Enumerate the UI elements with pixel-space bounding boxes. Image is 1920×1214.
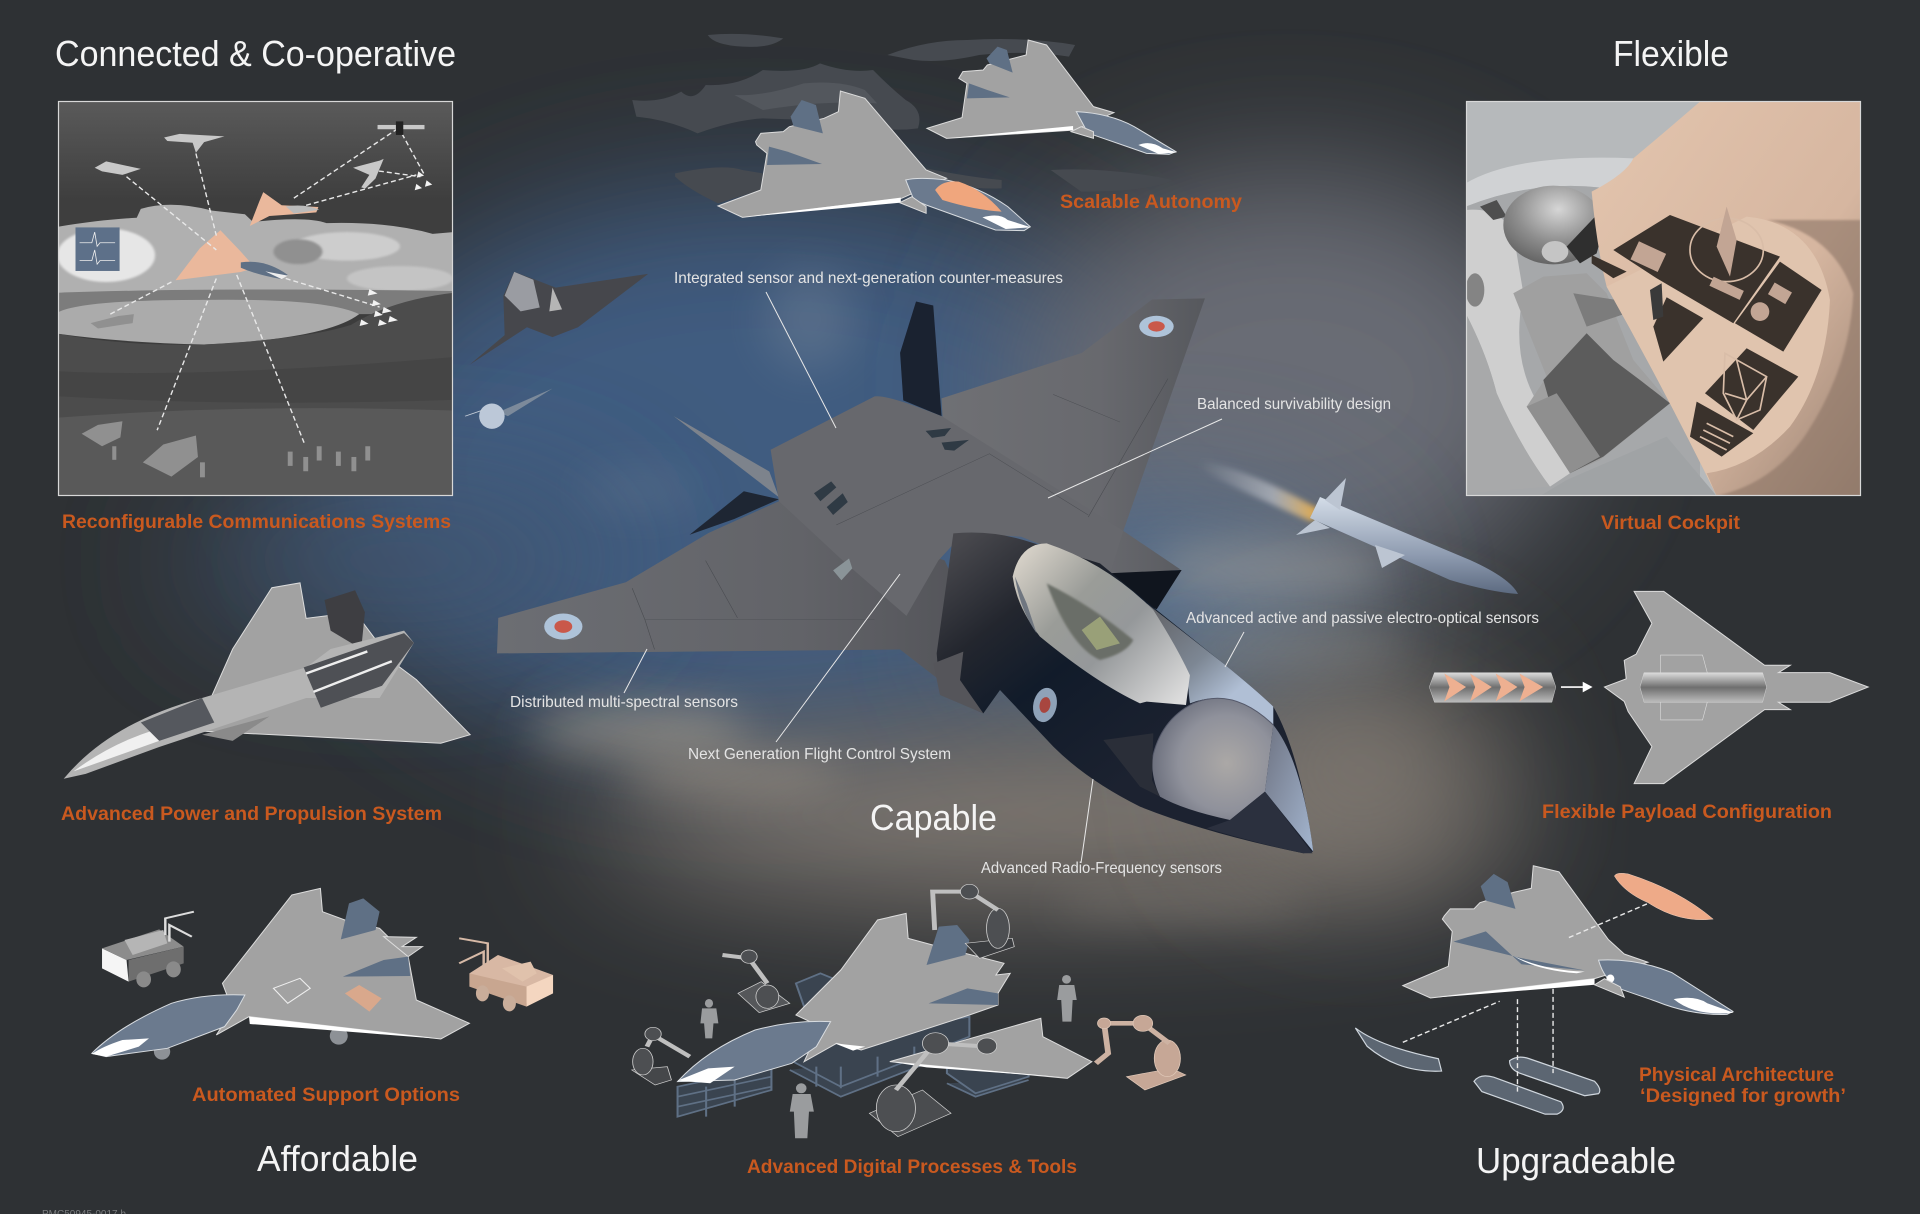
- sub: pilot body: [1513, 273, 1670, 473]
- heading: Upgradeable: Upgradeable: [1476, 1140, 1676, 1181]
- heading: Affordable: Affordable: [257, 1138, 418, 1179]
- callout: flight control: [688, 574, 951, 763]
- sub: payload canister: [1429, 673, 1556, 702]
- sub: small missile: [465, 389, 552, 429]
- heading: Connected & Co-operative: Connected & Co-operative: [55, 33, 456, 74]
- sub: fin: [324, 590, 365, 649]
- sub: main displays: [1592, 215, 1822, 457]
- sub: left dark intake: [690, 491, 779, 535]
- sub: nose cone: [1265, 725, 1313, 852]
- label: physical architecture: Physical Architecture: [1639, 1065, 1834, 1086]
- panel border: cockpit: [1466, 102, 1860, 496]
- illustration: power and propulsion aircraft: [64, 583, 470, 779]
- label: scalable autonomy: Scalable Autonomy: [1060, 192, 1242, 213]
- sub: control stick: [1650, 283, 1663, 320]
- heading: Flexible: Flexible: [1613, 33, 1729, 74]
- sub: dark fin: [900, 302, 942, 416]
- label: power and propulsion: Advanced Power and Propulsion System: [61, 804, 442, 825]
- sub: helmet: [1503, 186, 1605, 264]
- sub: fuselage: [937, 532, 1313, 853]
- callout: multi-spectral sensors: Distributed multi-spectral sensors: [510, 694, 738, 711]
- panel: reconfigurable communications illustration: [57, 101, 454, 496]
- callout: multi-spectral sensors: [510, 649, 738, 711]
- callout: flight control: Next Generation Flight Control System: [688, 746, 951, 763]
- sub: ventral fin: [1107, 570, 1182, 609]
- sub: aircraft silhouettes: [95, 121, 424, 188]
- callout: balanced survivability: Balanced survivability design: [1197, 396, 1391, 413]
- heading: Capable: Capable: [870, 797, 997, 838]
- sub: upgrade canopy: [1614, 873, 1713, 920]
- label: automated support: Automated Support Options: [192, 1085, 460, 1106]
- sub: ejection seat: [1466, 210, 1570, 487]
- sub: peach robot: [1096, 1015, 1186, 1090]
- sub: canopy shell: [1466, 158, 1633, 207]
- main aircraft nose and canopy: [933, 532, 1313, 853]
- sub: peach support cart: [459, 938, 553, 1011]
- sub: left wing: [497, 501, 1002, 713]
- arrow: load into aircraft: [1561, 682, 1593, 692]
- sub: upgrade pods: [1355, 1028, 1600, 1114]
- sub: roundels on wings: [544, 316, 1174, 640]
- sub: aircraft: [678, 913, 1092, 1083]
- sub: clouds: [632, 34, 1173, 203]
- sky backdrop: [180, 170, 1570, 917]
- sub: assembly guides: [1403, 903, 1648, 1092]
- sub: panel lines: [632, 379, 1168, 649]
- sub: grey support cart: [102, 912, 194, 987]
- sub: formation markers: [360, 171, 432, 326]
- sub: technicians: [700, 975, 1077, 1138]
- sub: slanted fin: [674, 416, 779, 497]
- sub: aircraft: [1403, 866, 1734, 1014]
- label: reconfigurable communications: Reconfigurable Communications Systems: [62, 512, 451, 533]
- callout: electro-optical sensors: [1186, 610, 1539, 667]
- sub: fuselage roundel: [1030, 686, 1060, 724]
- callout: radio-frequency sensors: Advanced Radio-Frequency sensors: [981, 860, 1222, 877]
- sub: engine: [304, 633, 414, 708]
- callout: electro-optical sensors: Advanced active and passive electro-optical sensors: [1186, 610, 1539, 627]
- sub: ground units: [82, 314, 370, 477]
- sub: signal monitor: [76, 227, 120, 271]
- panel: virtual cockpit illustration: [1466, 101, 1862, 496]
- illustration: digital processes: [632, 884, 1186, 1138]
- illustration: designed for growth: [1355, 866, 1734, 1114]
- main aircraft wings and body: [465, 272, 1205, 713]
- sub: chin: [1207, 792, 1313, 853]
- sub: vents: [814, 428, 969, 515]
- callout: integrated sensor: Integrated sensor and next-generation counter-measures: [674, 270, 1063, 287]
- sub: canopy: [1013, 543, 1190, 705]
- callout: balanced survivability: [1048, 396, 1391, 498]
- sub: aircraft: [92, 888, 469, 1060]
- sub: robot arms: [632, 884, 1014, 1137]
- sub: upper wing: [942, 298, 1205, 576]
- label: physical architecture: [1639, 1065, 1846, 1107]
- sub: platforms: [678, 973, 1029, 1117]
- label: virtual cockpit: Virtual Cockpit: [1601, 513, 1741, 534]
- sub: small delta aircraft: [470, 272, 648, 365]
- sub: peach visor zone: [1592, 102, 1862, 496]
- illustration: flexible payload: [1429, 591, 1868, 784]
- callout: radio-frequency sensors: [981, 779, 1222, 877]
- sub: forebody: [64, 631, 414, 779]
- missile: [1200, 460, 1518, 594]
- illustration: automated support: [92, 888, 553, 1060]
- sub: peach aircraft: [176, 192, 319, 280]
- illustration: scalable autonomy aircraft pair: [632, 34, 1177, 231]
- panel border: communications: [58, 102, 452, 496]
- sub: strake: [933, 652, 983, 713]
- label: flexible payload: Flexible Payload Configuration: [1542, 802, 1832, 823]
- sub: display detail: [1690, 218, 1767, 450]
- sub: data links: [110, 129, 424, 443]
- callout: integrated sensor: [674, 270, 1063, 428]
- sub: radome: [1152, 698, 1273, 820]
- label: digital processes: Advanced Digital Processes & Tools: [747, 1157, 1077, 1178]
- sub: front aircraft: [718, 91, 1031, 231]
- sub: rear aircraft: [927, 40, 1177, 154]
- sub: central body: [771, 396, 1123, 616]
- sub: top-view aircraft: [1604, 591, 1868, 784]
- label: physical architecture: ‘Designed for growth’: [1640, 1086, 1846, 1107]
- sub: spine highlight: [1147, 603, 1273, 727]
